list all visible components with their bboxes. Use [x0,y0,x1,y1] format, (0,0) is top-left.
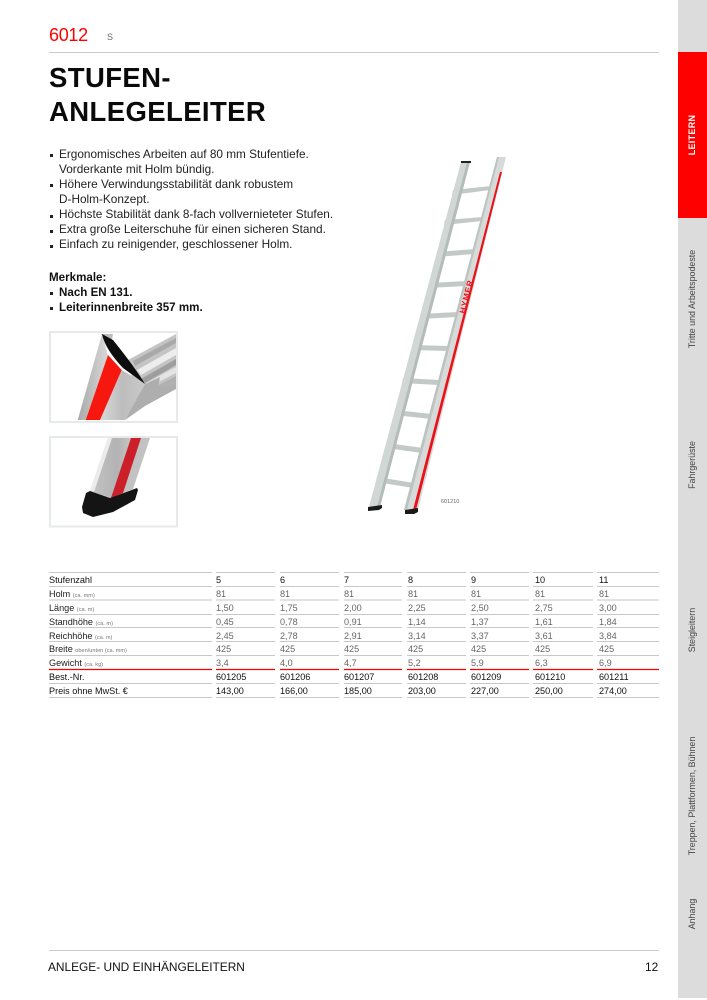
specification table: 2,91 [344,630,362,640]
ladder illustration [368,157,506,514]
features block: Merkmale: Merkmale: [49,271,106,284]
rungs [376,186,491,488]
specification table: 6 [280,575,285,585]
specification table: Holm (ca. mm) [49,589,95,599]
tab label: Anhang: Anhang [687,899,697,929]
footer section title: ANLEGE- UND EINHÄNGELEITERN [48,960,245,974]
specification table: 425 [216,644,231,654]
specification table: Standhöhe (ca. m) [49,617,113,627]
red stripe [413,172,502,510]
specification table: 185,00 [344,686,372,696]
specification table: 5,9 [471,658,484,668]
specification table: 425 [280,644,295,654]
specification table: 3,00 [599,603,617,613]
specification table: 2,00 [344,603,362,613]
photo: rail top detail [49,331,178,423]
specification table: 81 [535,589,545,599]
specification table: 601210 [535,672,565,682]
specification table: 4,0 [280,658,293,668]
specification table: 601209 [471,672,501,682]
tab label: Leitern: LEITERN [687,115,697,155]
specification table: 81 [280,589,290,599]
ladder item number: 601210 [441,499,459,505]
specification table: Stufenzahl [49,575,92,585]
feet [368,505,382,511]
photo: ladder foot detail [49,436,178,528]
specification table: 425 [408,644,423,654]
tab label: Steigleitern: Steigleitern [687,608,697,652]
title: ANLEGELEITER [49,96,266,126]
tab label: Tritte und Arbeitspodeste: Tritte und Arbeitspodeste [687,250,697,348]
page number heading: 6012: 6012 [49,25,88,45]
specification table: 425 [471,644,486,654]
specification table: 81 [344,589,354,599]
feature list: Extra große Leiterschuhe für einen sicheren Stand. [59,222,326,236]
specification table: 250,00 [535,686,563,696]
specification table: 7 [344,575,349,585]
specification table: 601205 [216,672,246,682]
specification table: 5 [216,575,221,585]
specification table: 601211 [599,672,629,682]
load class label: S [107,32,113,42]
sidebar navigation [678,0,707,998]
feature list [50,147,333,251]
features block: Merkmale: Leiterinnenbreite 357 mm. [59,301,203,314]
specification table: Preis ohne MwSt. € [49,686,128,696]
specification table: 81 [471,589,481,599]
specification table: 81 [408,589,418,599]
specification table: 8 [408,575,413,585]
feature list: D-Holm-Konzept. [59,192,149,206]
specification table: 0,91 [344,617,362,627]
specification table: 3,37 [471,630,489,640]
specification table: 4,7 [344,658,357,668]
specification table: 1,61 [535,617,553,627]
specification table: 1,50 [216,603,234,613]
feature list: Höhere Verwindungsstabilität dank robustem [59,177,293,191]
specification table: 2,50 [471,603,489,613]
title [49,62,266,126]
right rail [404,157,506,510]
specification table: 5,2 [408,658,421,668]
specification table: Best.-Nr. [49,672,84,682]
tab label: Fahrgerüste: Fahrgerüste [687,441,697,489]
left rail [369,162,470,507]
specification table: 3,14 [408,630,426,640]
feature list: Vorderkante mit Holm bündig. [59,162,214,176]
specification table: 425 [344,644,359,654]
specification table: 11 [599,575,608,585]
title: STUFEN- [49,62,171,92]
specification table: 2,78 [280,630,298,640]
specification table: 601207 [344,672,374,682]
specification table: 2,25 [408,603,426,613]
specification table [49,575,629,696]
specification table: 0,78 [280,617,298,627]
specification table: 1,84 [599,617,617,627]
specification table: 3,4 [216,658,229,668]
specification table: 3,84 [599,630,617,640]
specification table: 1,37 [471,617,489,627]
features block: Merkmale: Nach EN 131. [59,286,132,299]
specification table: 3,61 [535,630,553,640]
specification table: 143,00 [216,686,244,696]
specification table: 9 [471,575,476,585]
specification table: Länge (ca. m) [49,603,94,613]
feature list: Ergonomisches Arbeiten auf 80 mm Stufentiefe. [59,147,309,161]
specification table: 227,00 [471,686,499,696]
specification table: Gewicht (ca. kg) [49,658,103,668]
tab label: Treppen, Plattformen, Bühnen: Treppen, Plattformen, Bühnen [687,737,697,855]
specification table: 601206 [280,672,310,682]
specification table: 81 [599,589,609,599]
specification table: 2,45 [216,630,234,640]
feature list: Höchste Stabilität dank 8-fach vollvernieteter Stufen. [59,207,333,221]
specification table: 81 [216,589,226,599]
specification table: 274,00 [599,686,627,696]
specification table: 425 [599,644,614,654]
page number: 12 [645,960,658,974]
specification table: 166,00 [280,686,308,696]
specification table: 203,00 [408,686,436,696]
specification table: 1,14 [408,617,426,627]
specification table: 0,45 [216,617,234,627]
specification table: 2,75 [535,603,553,613]
brand marking: HYMER [457,278,475,314]
specification table: 1,75 [280,603,298,613]
specification table: Breite oben/unten (ca. mm) [49,644,127,654]
specification table: 6,3 [535,658,548,668]
active tab: Leitern [678,52,707,218]
specification table: 425 [535,644,550,654]
specification table: 6,9 [599,658,612,668]
specification table: 10 [535,575,545,585]
features block: Merkmale [49,271,203,314]
feature list: Einfach zu reinigender, geschlossener Holm. [59,237,292,251]
specification table: Reichhöhe (ca. m) [49,630,112,640]
specification table: 601208 [408,672,438,682]
